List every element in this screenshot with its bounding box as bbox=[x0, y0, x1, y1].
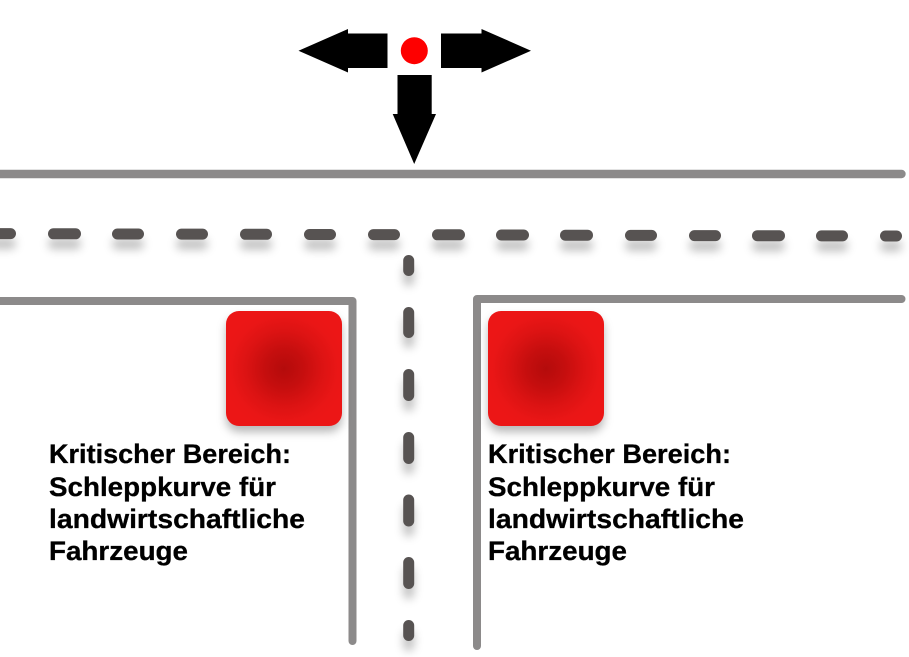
text block: right label: landwirtschaftliche bbox=[488, 504, 744, 534]
icon: right arrow bbox=[441, 29, 531, 72]
icon: down arrow bbox=[393, 75, 436, 164]
road edge: lower right corner bbox=[477, 299, 902, 646]
vertical dashed centre line bbox=[403, 260, 414, 636]
right red square bbox=[488, 311, 604, 426]
critical area: red squares bbox=[226, 311, 604, 426]
road edge: lower left corner bbox=[0, 301, 352, 641]
icon: red dot bbox=[401, 37, 428, 64]
text block: right label bbox=[488, 439, 744, 566]
road edge: top line bbox=[0, 170, 902, 178]
text block: left label: Fahrzeuge bbox=[49, 536, 188, 566]
text block: left label: Kritischer Bereich: bbox=[49, 439, 291, 469]
text block: right label: Kritischer Bereich: bbox=[488, 439, 731, 469]
text block: right label: Schleppkurve für bbox=[488, 472, 716, 502]
text block: left label bbox=[49, 439, 305, 566]
left red square bbox=[226, 311, 342, 426]
horizontal dashed centre line bbox=[0, 234, 896, 236]
icon: left arrow bbox=[298, 29, 388, 72]
text block: right label: Fahrzeuge bbox=[488, 536, 627, 566]
text block: left label: landwirtschaftliche bbox=[49, 504, 305, 534]
text block: left label: Schleppkurve für bbox=[49, 472, 277, 502]
